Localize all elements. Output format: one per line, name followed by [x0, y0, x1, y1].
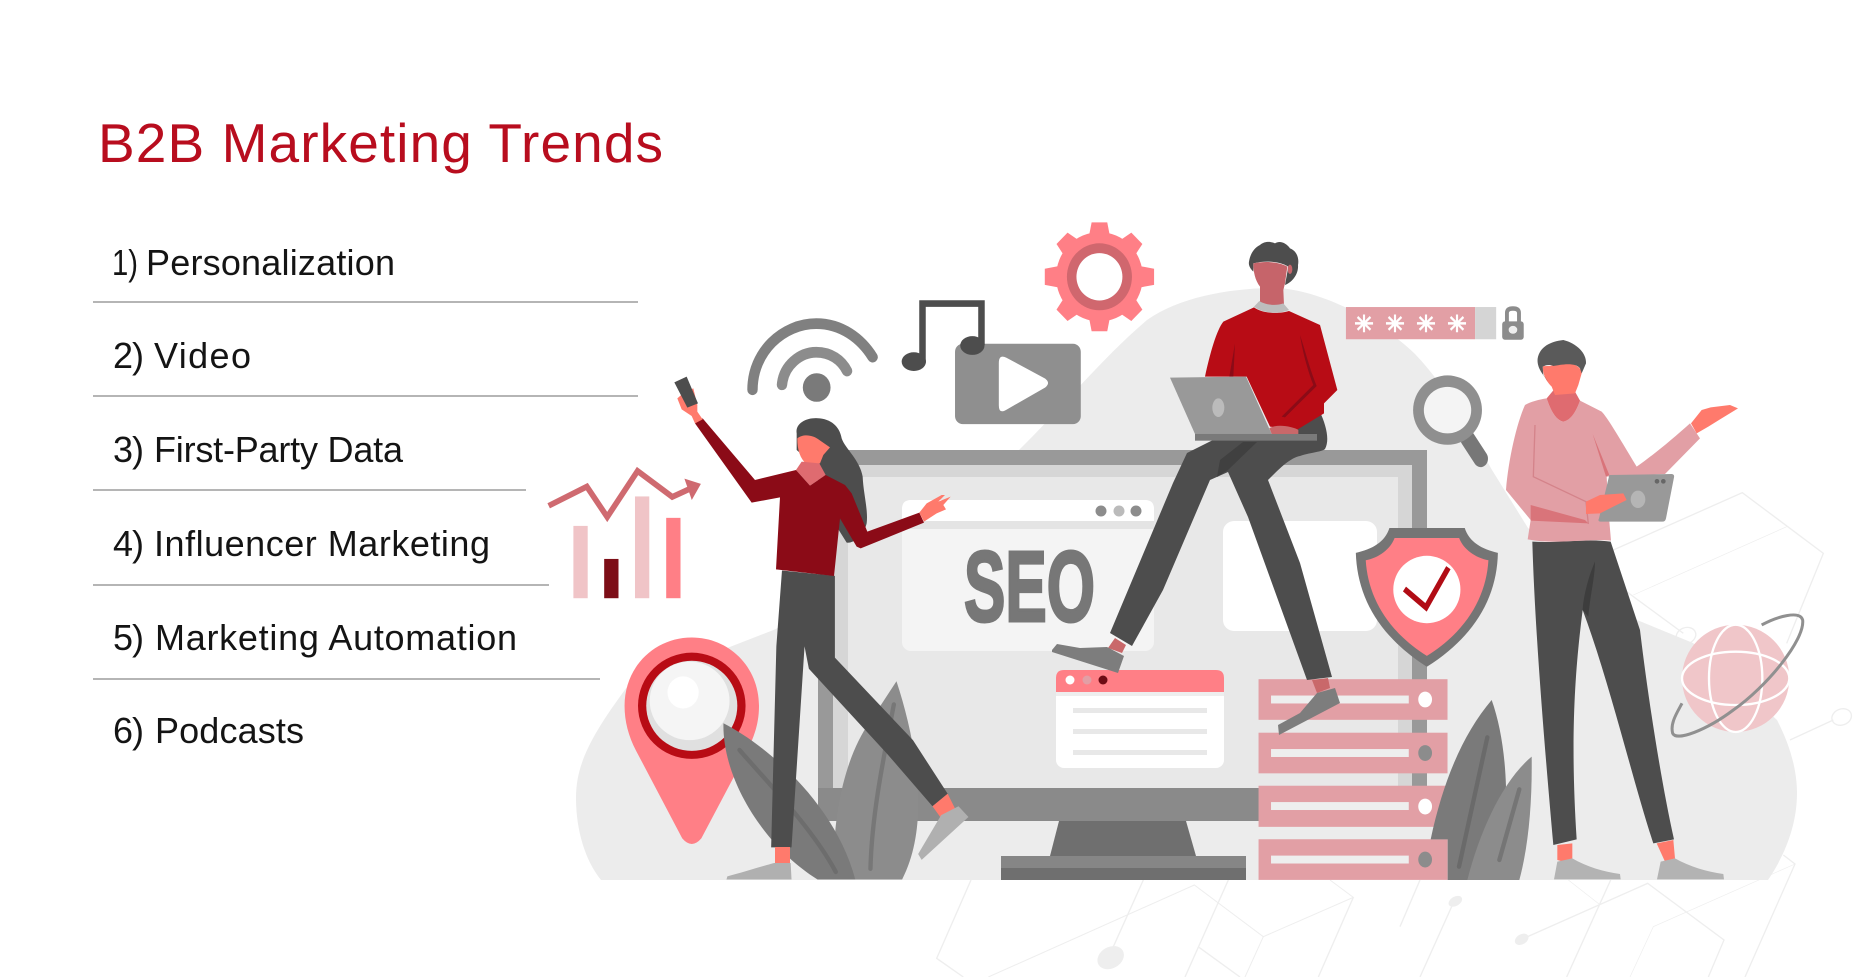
icon: gear [1045, 222, 1154, 331]
figure: standing man with tablet [1506, 340, 1738, 879]
hair [797, 418, 867, 543]
item 3: 3) [113, 429, 144, 470]
hand on tablet [1586, 493, 1627, 514]
background blob [576, 288, 1797, 880]
face and neck [1253, 262, 1287, 308]
icon: location pin [625, 638, 759, 844]
SEO text: SEO [964, 531, 1095, 643]
servers stack [1259, 679, 1448, 880]
list of trends [93, 242, 638, 751]
item 4 [93, 523, 549, 585]
icon: padlock [1502, 309, 1524, 340]
open hand [919, 495, 951, 522]
plant: left leaves [723, 681, 918, 879]
item 4: 4) [113, 523, 144, 564]
item 5 [93, 617, 600, 679]
upper body [1506, 340, 1738, 542]
figure: woman with phone [674, 377, 968, 879]
neck [796, 462, 826, 486]
left ankle [775, 847, 790, 865]
right shoe [918, 806, 968, 860]
icon: globe with orbit [1672, 615, 1803, 736]
background network lines right [1400, 493, 1854, 977]
ankles [1557, 840, 1675, 862]
item 2 [93, 335, 638, 396]
item 5: 5) [113, 617, 144, 658]
item 2: 2) [113, 335, 144, 376]
item 6: 6) [113, 710, 144, 751]
item 6: Podcasts [155, 710, 304, 751]
raised hand [677, 388, 703, 423]
sweater [1205, 307, 1337, 430]
item 1: Personalization [146, 242, 395, 283]
raised hand [1691, 405, 1738, 433]
pants [1110, 412, 1332, 680]
icon: shield with check [1356, 528, 1498, 667]
right ankle [1312, 678, 1330, 693]
sweater [1506, 398, 1700, 542]
icon: line and bar chart [549, 471, 701, 598]
item 3 [93, 429, 526, 490]
sleeve fold [1533, 425, 1588, 524]
popup window [1056, 670, 1224, 768]
SEO browser window [902, 500, 1154, 651]
shoes [1554, 858, 1724, 879]
monitor [818, 450, 1427, 880]
laptop screen [1170, 377, 1272, 434]
laptop base [1195, 434, 1317, 441]
hand [1269, 426, 1298, 434]
item 1: 1) [112, 242, 138, 283]
item 5: Marketing Automation [155, 617, 517, 658]
left ankle [1108, 638, 1126, 653]
upper body [1170, 242, 1337, 441]
thigh shadow [1217, 442, 1257, 477]
icon: password field [1346, 307, 1496, 339]
sweater folds [1229, 335, 1317, 417]
item 2: Video [154, 335, 251, 376]
right ankle [932, 794, 955, 818]
right shoe [1278, 688, 1340, 735]
face [1543, 364, 1582, 395]
phone [674, 377, 698, 408]
left shoe [1052, 644, 1124, 673]
icon: video player [955, 344, 1081, 424]
laptop logo [1212, 398, 1224, 417]
tablet [1598, 474, 1674, 522]
sweater shadow [1531, 434, 1609, 523]
sweater [695, 418, 924, 576]
hair [1538, 340, 1586, 382]
pants [771, 571, 948, 847]
title: B2B Marketing Trends [98, 112, 663, 174]
plant: right leaves [1431, 700, 1532, 880]
face [797, 435, 830, 464]
collar [1254, 301, 1289, 313]
icon: wifi [752, 324, 873, 402]
pants fold [1583, 562, 1595, 617]
icon: music note [902, 304, 985, 371]
hair [1249, 242, 1298, 285]
tablet button [1631, 491, 1645, 508]
pants [1532, 540, 1674, 845]
ear [1288, 265, 1292, 274]
icon: magnifying glass [1413, 375, 1482, 459]
item 3: First-Party Data [154, 429, 404, 470]
item 1 [93, 242, 638, 302]
figure: man with laptop [1052, 242, 1340, 735]
left shoe [726, 863, 792, 879]
tablet cameras [1655, 479, 1666, 484]
chest [1547, 388, 1580, 422]
item 4: Influencer Marketing [154, 523, 490, 564]
background network lines bottom [937, 880, 1353, 977]
